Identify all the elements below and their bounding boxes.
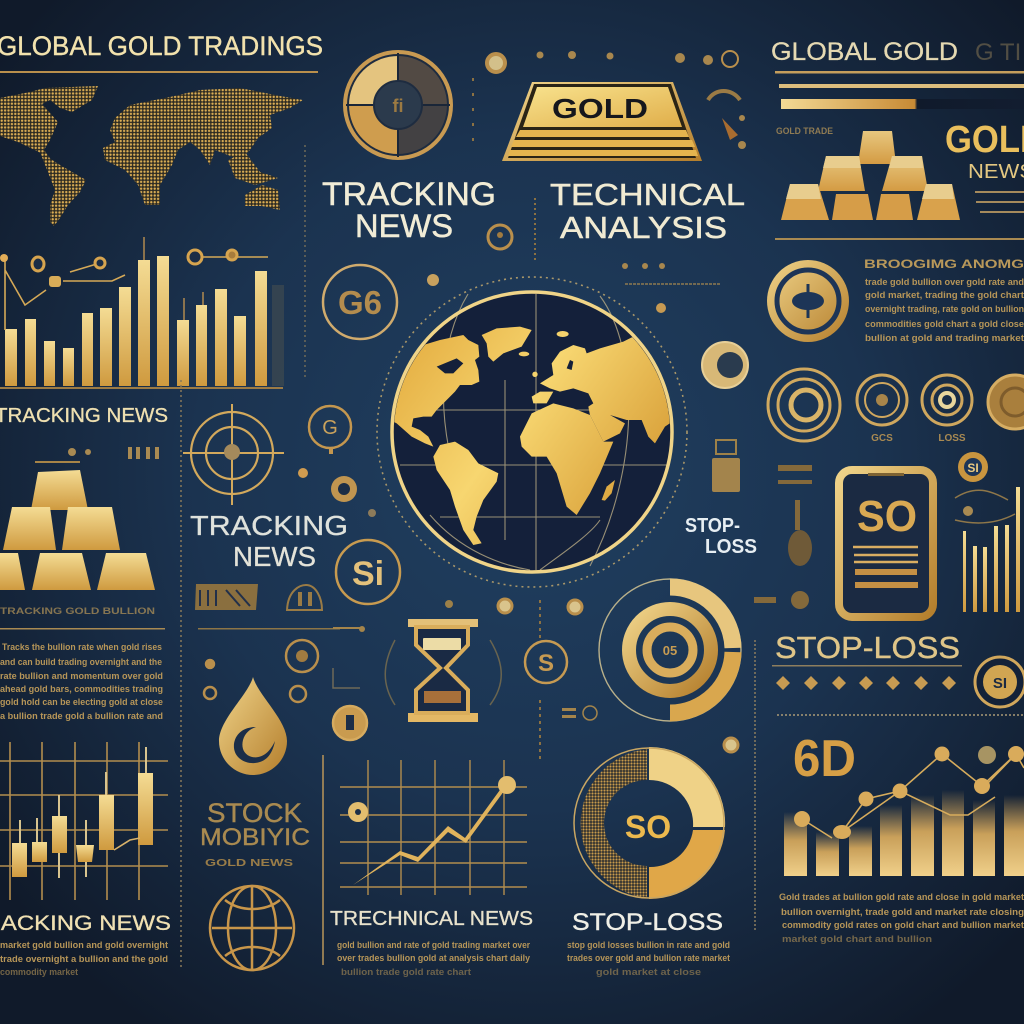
faded heading end: G TI: [975, 39, 1021, 66]
text block: right notes: [864, 257, 1024, 343]
big label: 6D: 6D: [793, 730, 856, 788]
heading: stop-loss: STOP-LOSS: [572, 909, 723, 936]
text block: right notes: overnight trading, rate gold on bullion: [865, 304, 1024, 314]
donut chart: [574, 747, 725, 899]
small icons near hourglass: [333, 600, 738, 760]
gold bars stack: [781, 131, 960, 220]
icon: G coin: [323, 265, 397, 339]
heading: TECHNICAL: [550, 177, 745, 212]
decorative lamp icon: [754, 465, 812, 609]
icon: S coin: [336, 540, 400, 604]
text block: news notes: commodity market: [0, 967, 78, 977]
text block: chart notes: Gold trades at bullion gold rate and close in gold market: [779, 892, 1024, 902]
icon: S coin small: [525, 641, 567, 683]
candlestick chart: [0, 742, 168, 900]
text block: right notes: bullion at gold and trading market: [865, 333, 1024, 343]
combo chart: [784, 746, 1024, 876]
gold bars pyramid: [0, 462, 155, 590]
text block: chart notes: [779, 892, 1024, 944]
icon: quartered coin: [343, 50, 453, 160]
small icons near droplet: [204, 640, 367, 740]
heading: TRACKING: [322, 176, 496, 212]
icon: target ring chart: [599, 579, 741, 721]
icon: small ring: [488, 225, 512, 249]
heading: global gold: GLOBAL GOLD: [771, 38, 958, 66]
header rules: [775, 71, 1024, 109]
text block: chart notes: market gold chart and bullion: [782, 934, 932, 944]
icon: coin SI top: SI: [967, 461, 979, 475]
icon: quartered coin: fi: [392, 96, 404, 116]
heading: tracking news centre-left: TRACKING: [190, 510, 348, 541]
icon: hourglass: [385, 619, 501, 722]
graticule: [400, 294, 670, 570]
icon: gold bar: [502, 82, 702, 161]
top centre: gold bar & technical analysis: ANALYSIS: [560, 210, 727, 245]
heading: stop-loss small: [685, 515, 757, 558]
text block: market notes: Tracks the bullion rate when gold rises: [2, 642, 162, 652]
globe rim: [392, 292, 672, 572]
globe disc: [393, 293, 671, 571]
text block: right notes: BROOGIMG ANOMG: [864, 257, 1024, 271]
text block: right notes: gold market, trading the gold chart: [865, 290, 1024, 300]
heading: stock: STOCK: [207, 798, 302, 828]
icon: wire globe: [210, 886, 294, 970]
icon: phone card: SO: [857, 492, 917, 541]
continents: [383, 327, 680, 545]
central globe: [377, 277, 687, 587]
caption: trading text: TRACKING GOLD BULLION: [0, 606, 155, 616]
text block: stop-loss notes: [567, 940, 730, 977]
text block: news notes: market gold bullion and gold overnight: [0, 940, 168, 950]
icon: S coin: Si: [352, 555, 384, 593]
text block: technical notes: gold bullion and rate of gold trading market over: [337, 940, 530, 950]
text block: technical notes: over trades bullion gold at analysis chart daily: [337, 953, 530, 963]
heading: tracking news: TRACKING NEWS: [0, 405, 168, 427]
heading: tracking news centre-left: NEWS: [233, 541, 316, 572]
line chart: technical news: [340, 760, 527, 895]
panel: right column: [754, 38, 1024, 944]
icon: G coin: G6: [338, 284, 382, 321]
text block: news notes: [0, 940, 168, 977]
text block: chart notes: bullion overnight, trade gold and market rate closing: [781, 907, 1024, 917]
icon: SI coin large: [975, 657, 1024, 707]
heading: stock: MOBIYIC: [200, 824, 310, 851]
text block: market notes: ahead gold bars, commodities trading: [0, 684, 163, 694]
small icons around target: G: [322, 417, 338, 439]
dotted world map: [0, 86, 303, 226]
heading: technical news: TRECHNICAL NEWS: [330, 908, 533, 930]
donut chart: SO: [625, 809, 671, 845]
text block: stop-loss notes: gold market at close: [596, 967, 701, 977]
heading: stock: GOLD NEWS: [205, 858, 293, 869]
text block: market notes: a bullion trade gold a bullion rate and: [0, 711, 163, 721]
text block: right notes: trade gold bullion over gold rate and: [865, 277, 1024, 287]
mini bar chart: [955, 487, 1020, 612]
top centre: tracking news: [322, 50, 512, 249]
small caption: GOLD TRADE: [776, 126, 833, 136]
text block: stop-loss notes: trades over gold and bullion rate market: [567, 953, 730, 963]
panel: left column: [0, 31, 323, 977]
text block: market notes: and can build trading overnight and the: [0, 657, 162, 667]
icon: target ring chart: 05: [663, 643, 677, 658]
coin labels: [871, 433, 966, 444]
heading: gold news: [945, 119, 1024, 212]
top centre: gold bar & technical analysis: [502, 82, 745, 245]
decorative icons top row: [473, 51, 746, 284]
text block: market notes: rate bullion and momentum over gold: [0, 671, 163, 681]
small icons around target: [195, 406, 376, 610]
target icon: [183, 404, 284, 505]
bar chart: trading volume: [0, 237, 284, 389]
heading: stock: [200, 798, 310, 869]
diamond row: [776, 676, 956, 690]
icon: SI coin large: SI: [993, 675, 1007, 692]
icon: phone card: [839, 470, 933, 617]
text block: stop-loss notes: stop gold losses bullion in rate and gold: [567, 940, 730, 950]
text block: technical notes: [337, 940, 530, 977]
text block: right notes: commodities gold chart a gold close: [865, 319, 1024, 329]
icon row: coins: [768, 369, 1024, 441]
heading: stop-loss small: LOSS: [705, 536, 757, 558]
heading: tracking news centre-left: [190, 510, 348, 572]
text block: news notes: trade overnight a bullion and the gold: [0, 954, 168, 964]
text block: technical notes: bullion trade gold rate chart: [341, 967, 471, 977]
text block: market notes: [0, 642, 163, 721]
vertical divider right: [754, 640, 756, 930]
icon: medal: [767, 260, 849, 342]
coin labels: LOSS: [938, 433, 966, 444]
vertical rule: [322, 755, 324, 965]
top centre: tracking news: NEWS: [355, 208, 453, 244]
icon: gold bar: GOLD: [552, 93, 648, 124]
icon: droplet: [219, 677, 287, 775]
row rule centre-left: [198, 628, 340, 630]
text block: market notes: gold hold can be electing gold at close: [0, 697, 163, 707]
title: global gold tradings: GLOBAL GOLD TRADINGS: [0, 31, 323, 61]
small chart ticks: [68, 447, 159, 459]
vertical divider: [304, 145, 306, 380]
icon: coin SI top: [958, 452, 988, 482]
icon: S coin small: S: [538, 650, 554, 677]
heading: stop-loss small: STOP-: [685, 515, 740, 537]
heading: stop-loss large: STOP-LOSS: [775, 630, 960, 665]
dotted orbit ring: [377, 277, 687, 587]
icons around globe: [427, 274, 748, 614]
text block: chart notes: commodity gold rates on gold chart and bullion market: [782, 920, 1024, 930]
coin labels: GCS: [871, 433, 893, 444]
